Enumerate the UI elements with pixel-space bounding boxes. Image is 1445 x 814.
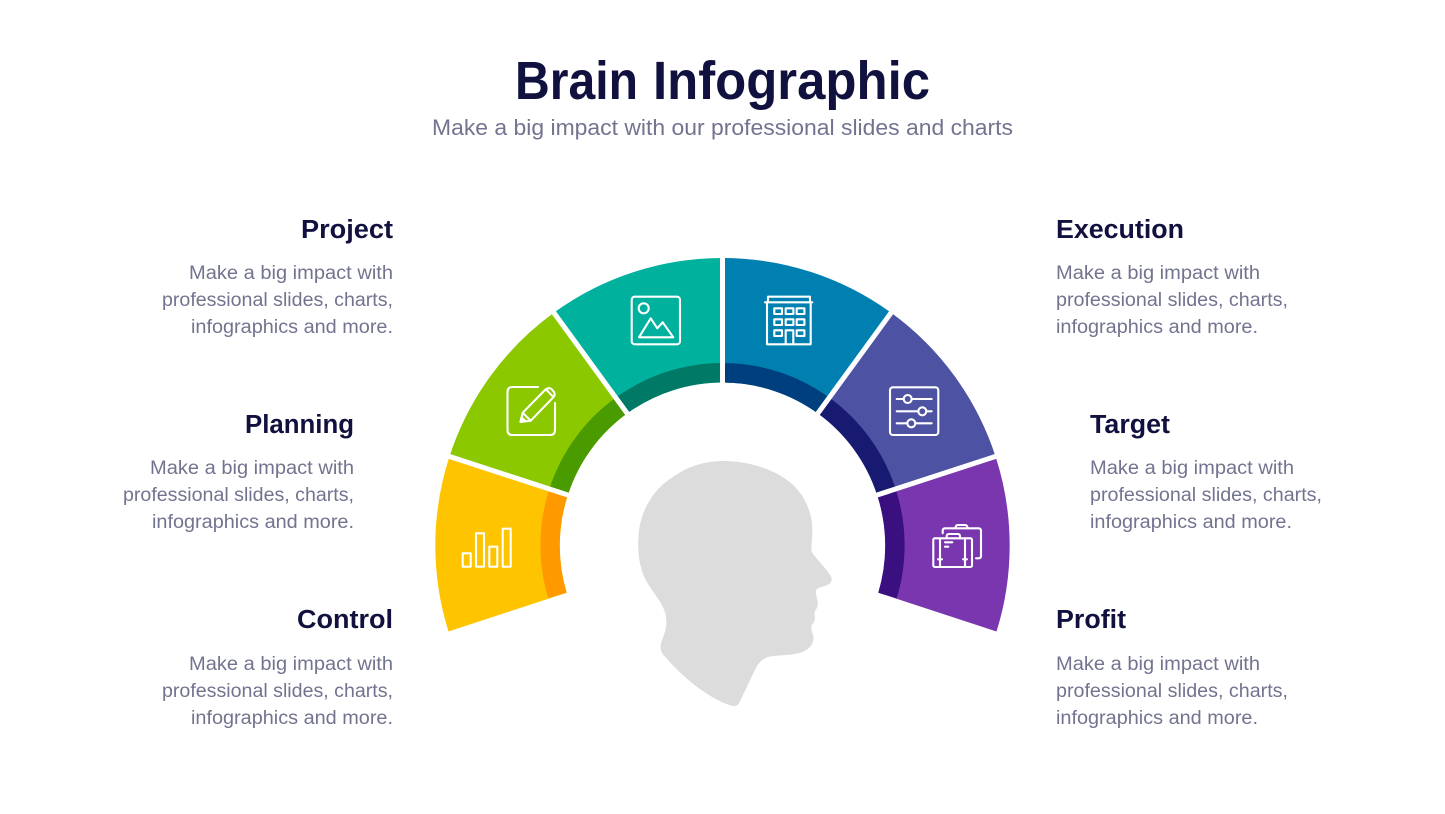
segment: profit (purple) (877, 456, 1010, 632)
text block: control: Make a big impact with (189, 654, 393, 675)
text block: project: Make a big impact with (189, 263, 393, 284)
text block: project (162, 216, 394, 338)
text block: planning: Planning (245, 411, 354, 439)
icon: building (765, 297, 812, 344)
title: Infographic (653, 51, 930, 111)
text block: profit: infographics and more. (1056, 708, 1258, 729)
icon: pencil and note (508, 387, 555, 435)
segment: control (yellow) (435, 456, 568, 632)
text block: project: infographics and more. (191, 317, 393, 338)
segment: execution (blue) (722, 258, 891, 414)
icon: sliders (890, 387, 938, 435)
text block: planning: Make a big impact with (150, 458, 354, 479)
text block: execution: Make a big impact with (1056, 263, 1260, 284)
segment: target (indigo) (818, 313, 995, 495)
text block: control: Control (297, 606, 393, 634)
text block: planning: professional slides, charts, (123, 485, 354, 506)
text block: target (1090, 411, 1322, 533)
text block: target: Make a big impact with (1090, 458, 1294, 479)
segment: planning (green) (450, 313, 627, 495)
text block: planning: infographics and more. (152, 512, 354, 533)
text block: planning (123, 411, 354, 533)
icon: briefcases (933, 525, 981, 567)
text block: execution: professional slides, charts, (1056, 290, 1288, 311)
icon: bar chart (463, 529, 511, 567)
text block: execution: Execution (1056, 216, 1184, 244)
text block: project: Project (301, 216, 394, 244)
text block: control (162, 606, 393, 729)
text block: execution: infographics and more. (1056, 317, 1258, 338)
subtitle: Make a big impact with our professional slides and charts (432, 115, 1013, 140)
text block: project: professional slides, charts, (162, 290, 393, 311)
head silhouette (638, 461, 832, 706)
segment: project (teal) (554, 258, 722, 414)
text block: profit: Profit (1056, 606, 1127, 634)
text block: profit: professional slides, charts, (1056, 681, 1288, 702)
semicircle chart (435, 250, 1010, 632)
text block: target: professional slides, charts, (1090, 485, 1322, 506)
text block: profit: Make a big impact with (1056, 654, 1260, 675)
title: Brain (515, 51, 638, 111)
text block: control: professional slides, charts, (162, 681, 393, 702)
text block: target: Target (1090, 411, 1171, 439)
text block: target: infographics and more. (1090, 512, 1292, 533)
text block: profit (1056, 606, 1288, 729)
text block: control: infographics and more. (191, 708, 393, 729)
icon: picture (632, 297, 680, 344)
title (515, 51, 930, 111)
text block: execution (1056, 216, 1288, 338)
